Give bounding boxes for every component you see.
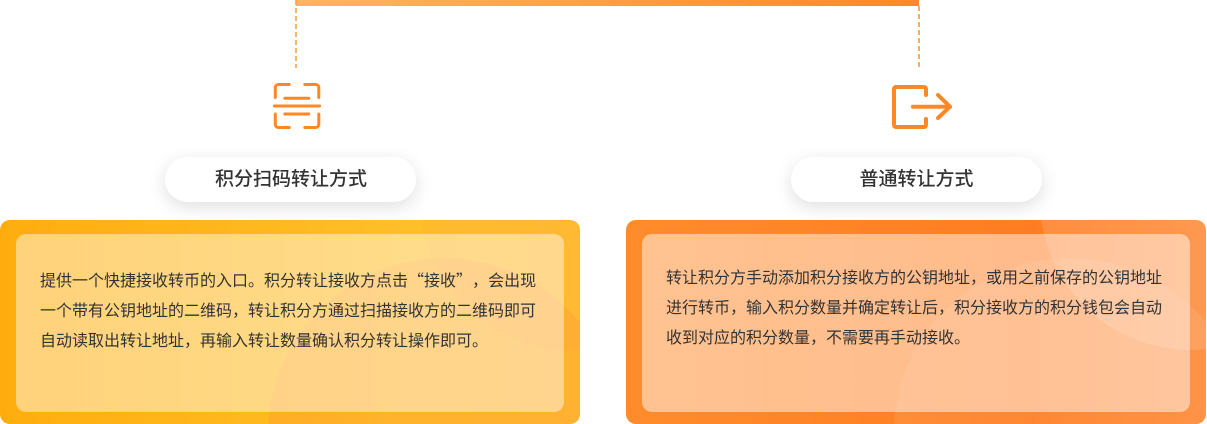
icon: transfer out arrow <box>892 85 952 129</box>
panel: scan transfer description: 自动读取出转让地址，再输入转让数量确认积分转让操作即可。 <box>40 333 488 350</box>
heading pill: scan transfer <box>165 157 416 202</box>
panel: normal transfer description: 进行转币，输入积分数量并确定转让后，积分接收方的积分钱包会自动 <box>666 300 1162 317</box>
icon: scan code <box>272 83 322 129</box>
right dashed connector <box>918 6 920 67</box>
panel: normal transfer description <box>626 220 1206 424</box>
panel: scan transfer description: 提供一个快捷接收转币的入口。积分转让接收方点击“接收”，会出现 <box>40 267 536 291</box>
panel: scan transfer description <box>0 220 580 424</box>
left dashed connector <box>295 0 297 68</box>
panel: normal transfer description: 转让积分方手动添加积分接收方的公钥地址，或用之前保存的公钥地址 <box>666 270 1162 287</box>
heading pill: normal transfer <box>791 157 1042 202</box>
heading pill: scan transfer: 积分扫码转让方式 <box>215 169 367 190</box>
heading pill: normal transfer: 普通转让方式 <box>859 169 974 190</box>
top connector bar <box>296 0 919 6</box>
panel: scan transfer description: 一个带有公钥地址的二维码，转让积分方通过扫描接收方的二维码即可 <box>40 303 536 320</box>
panel: normal transfer description: 收到对应的积分数量，不需要再手动接收。 <box>666 330 970 347</box>
